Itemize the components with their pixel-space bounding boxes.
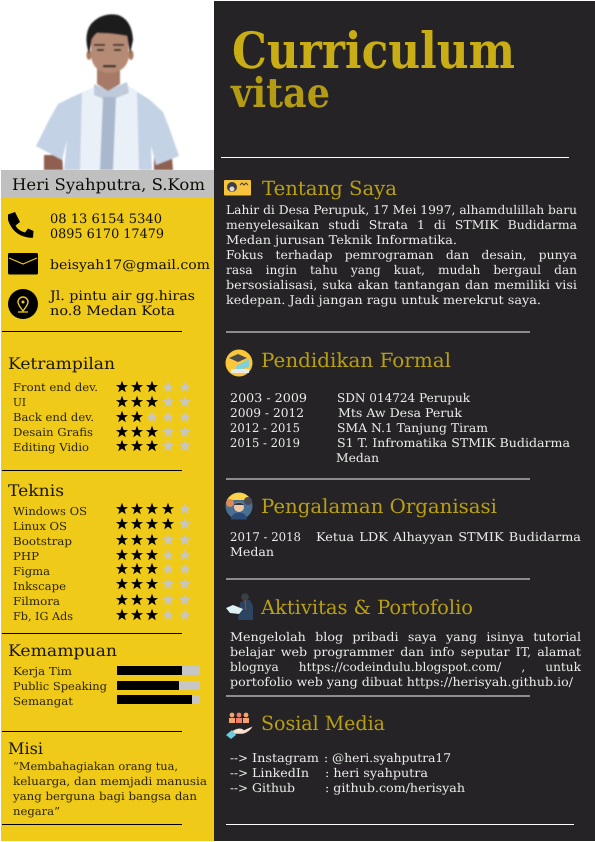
bar: kerja tim: Kerja Tim bbox=[13, 665, 73, 678]
rating: linux bbox=[13, 518, 191, 533]
phone numbers bbox=[50, 212, 164, 242]
address: Jl. pintu air gg.hiras bbox=[48, 289, 195, 304]
section: ketrampilan bbox=[8, 354, 191, 454]
education list: Mts Aw Desa Peruk bbox=[338, 406, 463, 420]
icon: envelope bbox=[8, 253, 38, 274]
paragraph: Mengelolah blog pribadi saya yang isinya tutorial bbox=[230, 630, 581, 644]
rating: php bbox=[13, 549, 191, 563]
organisation entry: 2017 - 2018 bbox=[230, 530, 301, 544]
social links bbox=[230, 751, 465, 795]
rating: editing vidio: Editing Vidio bbox=[13, 441, 89, 454]
contact details bbox=[8, 212, 210, 319]
section: pendidikan formal bbox=[226, 349, 570, 465]
section: tentang saya bbox=[224, 177, 577, 307]
mission quote: “Membahagiakan orang tua, bbox=[13, 760, 178, 773]
paragraph bbox=[230, 630, 582, 689]
email: beisyah17@gmail.com bbox=[50, 258, 210, 273]
rating: bootstrap: Bootstrap bbox=[13, 535, 72, 548]
address bbox=[48, 289, 195, 319]
address: no.8 Medan Kota bbox=[50, 304, 175, 319]
paragraph: blognya https://codeindulu.blogspot.com/ , untuk bbox=[230, 660, 582, 674]
social links: : heri syahputra bbox=[325, 766, 428, 780]
mission quote: yang berguna bagi bangsa dan bbox=[12, 790, 197, 803]
heading: Pengalaman Organisasi bbox=[261, 495, 497, 518]
rating: windows: Windows OS bbox=[13, 505, 87, 518]
paragraph: bersosialisasi, suka akan tantangan dan memiliki visi bbox=[226, 278, 577, 292]
heading: Kemampuan bbox=[8, 641, 117, 660]
rating: back end: Back end dev. bbox=[13, 411, 94, 424]
mission quote bbox=[12, 760, 207, 818]
paragraph: portofolio web yang dibuat https://herisyah.github.io/ bbox=[230, 675, 574, 689]
rating: figma bbox=[13, 563, 191, 578]
education list: SDN 014724 Perupuk bbox=[337, 391, 471, 405]
paragraph: Fokus terhadap pemrograman dan desain, punya bbox=[226, 248, 577, 262]
section: kemampuan bbox=[8, 641, 200, 708]
rating: fb ig ads bbox=[13, 609, 191, 623]
section: sosial media bbox=[226, 712, 465, 795]
rating: fb ig ads: Fb, IG Ads bbox=[13, 610, 73, 623]
heading: Pendidikan Formal bbox=[261, 349, 451, 372]
portrait photo bbox=[36, 14, 179, 170]
bar: semangat bbox=[13, 695, 200, 708]
paragraph: menyelesaikan studi Strata 1 di STMIK Budidarma bbox=[226, 218, 577, 232]
heading: Ketrampilan bbox=[8, 354, 115, 373]
icon: phone bbox=[8, 212, 34, 238]
social links: : github.com/herisyah bbox=[325, 781, 465, 795]
rating: inkscape: Inkscape bbox=[13, 580, 66, 593]
education list: 2009 - 2012 bbox=[230, 406, 304, 420]
phone numbers: 0895 6170 17479 bbox=[50, 227, 164, 242]
phone numbers: 08 13 6154 5340 bbox=[50, 212, 162, 227]
name bar bbox=[1, 170, 214, 197]
icon: graduation bbox=[226, 350, 252, 376]
sidebar bbox=[1, 14, 214, 841]
section: misi bbox=[8, 739, 207, 818]
education list: 2003 - 2009 bbox=[230, 391, 307, 405]
social links: : @heri.syahputra17 bbox=[324, 751, 451, 765]
icon: reader bbox=[226, 593, 253, 620]
icon: profile card bbox=[224, 180, 251, 196]
heading: Tentang Saya bbox=[262, 177, 397, 200]
section: aktivitas dan portofolio bbox=[226, 593, 582, 689]
rating: desain grafis bbox=[13, 426, 191, 439]
rating: back end bbox=[13, 411, 191, 424]
rating: editing vidio bbox=[13, 440, 191, 454]
bar: semangat: Semangat bbox=[13, 695, 74, 708]
rating: figma: Figma bbox=[13, 565, 50, 578]
social links: --> bbox=[230, 766, 248, 780]
organisation entry: Medan bbox=[230, 545, 274, 559]
social links: --> bbox=[230, 781, 248, 795]
organisation entry bbox=[230, 530, 581, 559]
title: vitae bbox=[230, 69, 330, 117]
icon: people bbox=[226, 492, 252, 520]
paragraph: kedepan. Jadi jangan ragu untuk merekrut saya. bbox=[226, 293, 541, 307]
section: pengalaman organisasi bbox=[226, 492, 581, 559]
heading: Aktivitas & Portofolio bbox=[260, 596, 473, 619]
mission quote: negara” bbox=[13, 805, 60, 818]
name bar: Heri Syahputra, S.Kom bbox=[12, 175, 205, 194]
icon: hand with people bbox=[226, 713, 253, 739]
icon: location bbox=[8, 289, 38, 319]
education list bbox=[230, 391, 570, 465]
organisation entry: Ketua LDK Alhayyan STMIK Budidarma bbox=[316, 530, 581, 544]
education list: SMA N.1 Tanjung Tiram bbox=[337, 421, 489, 435]
paragraph: Medan jurusan Teknik Informatika. bbox=[226, 233, 457, 247]
social links: LinkedIn bbox=[252, 766, 309, 780]
rating: front end bbox=[13, 381, 191, 394]
social links: --> bbox=[230, 751, 248, 765]
rating: bootstrap bbox=[13, 534, 191, 548]
rating: inkscape bbox=[13, 578, 191, 593]
rating: filmora: Filmora bbox=[13, 595, 60, 608]
education list: 2015 - 2019 bbox=[230, 436, 300, 450]
bar: public speaking bbox=[13, 680, 200, 693]
paragraph: belajar web programmer dan info seputar IT, alamat bbox=[230, 645, 581, 659]
bar: kerja tim bbox=[13, 665, 200, 678]
rating: desain grafis: Desain Grafis bbox=[13, 426, 93, 439]
paragraph bbox=[226, 203, 577, 307]
title: Curriculum bbox=[232, 21, 515, 80]
education list: Medan bbox=[336, 451, 379, 465]
mission quote: keluarga, dan memjadi manusia bbox=[13, 775, 207, 788]
rating: windows bbox=[13, 503, 191, 518]
education list: 2012 - 2015 bbox=[230, 421, 300, 435]
rating: linux: Linux OS bbox=[13, 520, 67, 533]
paragraph: Lahir di Desa Perupuk, 17 Mei 1997, alhamdulillah baru bbox=[226, 203, 577, 217]
paragraph: rasa ingin tahu yang kuat, mudah bergaul dan bbox=[226, 263, 577, 277]
education list: S1 T. Infromatika STMIK Budidarma bbox=[337, 436, 570, 450]
title bbox=[230, 21, 515, 117]
heading: Sosial Media bbox=[261, 712, 385, 735]
social links: Instagram bbox=[252, 751, 320, 765]
social links: Github bbox=[252, 781, 295, 795]
rating: ui bbox=[13, 396, 191, 409]
heading: Teknis bbox=[8, 481, 64, 500]
section: teknis bbox=[8, 481, 191, 623]
rating: front end: Front end dev. bbox=[13, 381, 98, 394]
rating: filmora bbox=[13, 594, 191, 608]
main dark panel bbox=[214, 1, 595, 841]
heading: Misi bbox=[8, 739, 43, 758]
rating: php: PHP bbox=[13, 550, 40, 563]
bar: public speaking: Public Speaking bbox=[13, 680, 107, 693]
rating: ui: UI bbox=[13, 396, 26, 409]
